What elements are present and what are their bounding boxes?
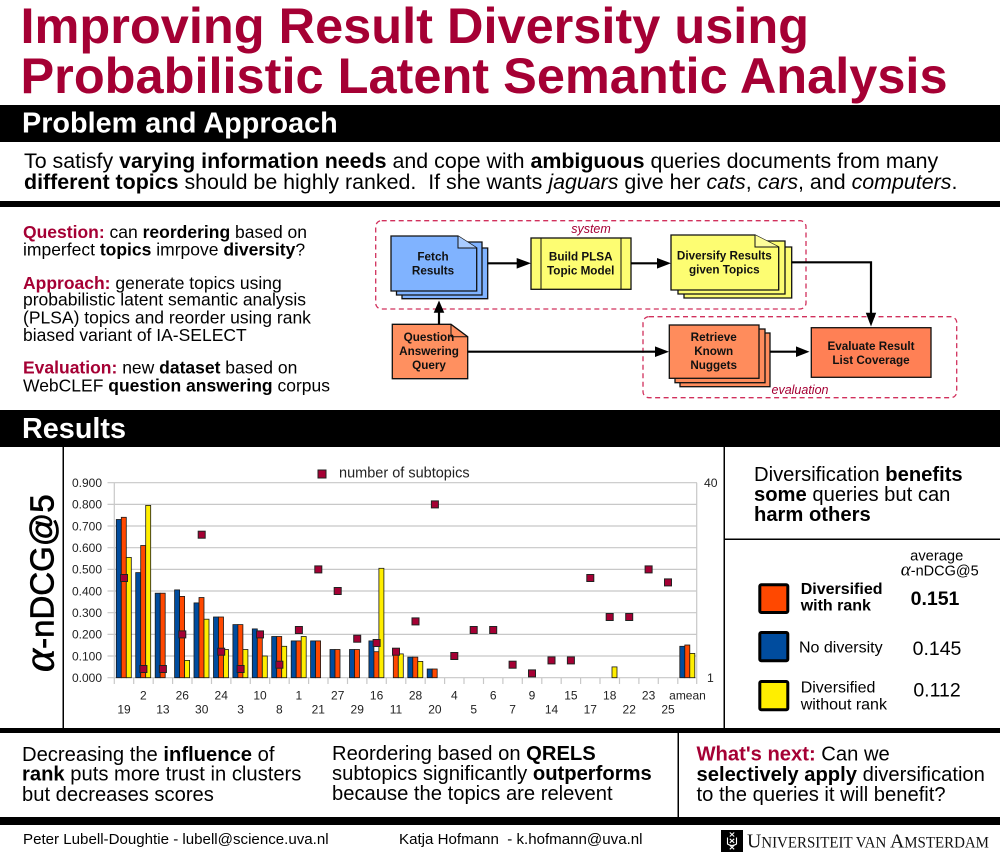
box: fetch results: Fetch	[417, 251, 449, 264]
x axis labels: 1	[296, 688, 303, 702]
y axis labels: 1	[707, 671, 714, 685]
text block: question	[23, 222, 307, 260]
text block: qrels	[332, 743, 652, 805]
x axis labels: 17	[584, 702, 597, 716]
logo: university of amsterdam: UNIVERSITEIT VAN AMSTERDAM	[747, 830, 989, 852]
panel: evaluation boundary	[643, 317, 957, 398]
arrow: retrieve to evaluate	[770, 346, 810, 357]
heading: problem and approach: Problem and Approach	[22, 108, 338, 140]
text block: evaluation: Evaluation: new dataset based on	[23, 358, 297, 378]
text block: influence of rank	[22, 744, 301, 806]
x axis labels: 27	[331, 688, 345, 702]
box: diversify results	[671, 235, 792, 298]
heading: problem and approach	[0, 105, 1000, 142]
x axis labels: 29	[351, 702, 364, 716]
legend item: diversified without rank: Diversified	[801, 680, 875, 697]
box: question answering query	[392, 324, 468, 379]
x axis labels: 20	[428, 702, 442, 716]
box: evaluate result list coverage	[811, 328, 931, 377]
box: build plsa topic model: Build PLSA	[549, 251, 613, 264]
panel: question approach evaluation	[23, 222, 330, 396]
box: fetch results	[391, 236, 488, 299]
text block: approach: Approach: generate topics using	[23, 273, 282, 293]
footer: authors: Katja Hofmann - k.hofmann@uva.nl	[399, 831, 643, 848]
text block: what's next: to the queries it will benefit?	[696, 784, 946, 806]
box: question answering query: Question	[404, 331, 454, 344]
x axis labels: 4	[451, 688, 458, 702]
text block: question: imperfect topics imrpove diversity?	[23, 240, 305, 260]
arrow: query to retrieve	[468, 346, 669, 357]
box: retrieve known nuggets: Retrieve	[691, 331, 737, 344]
x axis labels: 26	[176, 688, 189, 702]
x axis labels: 2	[140, 688, 147, 702]
x axis labels: 22	[623, 702, 636, 716]
title	[20, 0, 948, 104]
x axis labels: amean	[669, 688, 706, 702]
text block: influence of rank: Decreasing the influence of	[22, 744, 275, 766]
box: question answering query: Answering	[399, 345, 459, 358]
text block: approach	[23, 273, 311, 345]
text block: qrels: Reordering based on QRELS	[332, 743, 596, 765]
y axis labels: 0.900	[72, 476, 102, 490]
number of subtopics markers	[120, 501, 672, 677]
text block: evaluation: WebCLEF question answering corpus	[23, 376, 330, 396]
box: fetch results: Results	[412, 265, 455, 278]
x axis labels: 19	[117, 702, 131, 716]
legend item: diversified without rank: 0.112	[913, 680, 961, 702]
box: retrieve known nuggets: Nuggets	[690, 359, 738, 372]
box: build plsa topic model: Topic Model	[547, 265, 614, 278]
y axis labels: 0.500	[72, 563, 102, 577]
x axis labels: 3	[237, 702, 244, 716]
flow diagram	[376, 221, 957, 398]
y axis labels	[72, 476, 718, 685]
text block: influence of rank: but decreases scores	[22, 784, 214, 806]
legend item: no diversity: 0.145	[913, 638, 962, 660]
box: evaluate result list coverage: List Coverage	[832, 354, 910, 367]
panel: system boundary: system	[571, 222, 611, 236]
legend header: average	[910, 549, 963, 565]
text block: qrels: subtopics significantly outperforms	[332, 763, 652, 785]
bars	[116, 505, 695, 678]
legend item: diversified with rank	[760, 581, 960, 615]
box: retrieve known nuggets	[669, 325, 770, 387]
y axis labels: 0.300	[72, 606, 102, 620]
x axis labels: 16	[370, 688, 384, 702]
x axis labels: 25	[661, 702, 675, 716]
x axis labels: 13	[156, 702, 170, 716]
legend item: diversified with rank: Diversified	[801, 581, 883, 598]
box: diversify results: given Topics	[689, 263, 760, 276]
legend item: no diversity	[760, 632, 962, 661]
y axis labels: 0.600	[72, 541, 102, 555]
heading: results: Results	[22, 413, 126, 445]
panel: system boundary	[376, 221, 806, 309]
y axis labels: 0.000	[72, 671, 102, 685]
text block: approach: probabilistic latent semantic analysis	[23, 290, 306, 310]
arrow: build to diversify	[631, 258, 671, 269]
footer: authors: Peter Lubell-Doughtie - lubell@science.uva.nl	[23, 831, 329, 848]
text block: what's next: What's next: Can we	[696, 744, 890, 766]
box: retrieve known nuggets: Known	[694, 345, 733, 358]
x axis labels: 24	[215, 688, 228, 702]
x axis labels: 9	[529, 688, 536, 702]
text block: problem statement: different topics should be highly ranked. If she wants jaguars give her cats, cars, and computers.	[24, 170, 957, 194]
x axis labels: 14	[545, 702, 558, 716]
legend header	[901, 549, 979, 581]
text block: problem statement: To satisfy varying information needs and cope with ambiguous queries documents from many	[24, 149, 938, 173]
legend item: diversified without rank: without rank	[800, 696, 888, 713]
box: evaluate result list coverage: Evaluate Result	[827, 340, 915, 353]
text block: problem statement	[24, 149, 957, 194]
text block: qrels: because the topics are relevent	[332, 783, 613, 805]
legend item: diversified with rank: with rank	[800, 598, 871, 615]
legend item: diversified with rank: 0.151	[911, 588, 960, 610]
axis title: alpha-nDCG@5: α-nDCG@5	[14, 494, 64, 672]
legend header: α-nDCG@5	[901, 560, 979, 581]
box: build plsa topic model	[531, 238, 631, 289]
x axis labels: 6	[490, 688, 497, 702]
y axis labels: 0.100	[72, 649, 102, 663]
text block: influence of rank: rank puts more trust in clusters	[22, 764, 301, 786]
y axis labels: 0.400	[72, 584, 102, 598]
y axis labels: 0.200	[72, 628, 102, 642]
text block: diversification benefits: some queries but can	[754, 484, 950, 506]
box: question answering query: Query	[412, 359, 446, 372]
text block: what's next: selectively apply diversification	[696, 764, 985, 786]
text block: approach: (PLSA) topics and reorder using rank	[23, 307, 311, 327]
arrow: fetch to build	[488, 258, 531, 269]
x axis labels: 10	[253, 688, 267, 702]
title: Probabilistic Latent Semantic Analysis	[20, 47, 948, 104]
x axis labels: 5	[470, 702, 477, 716]
x axis labels: 21	[312, 702, 325, 716]
arrow: query to fetch	[434, 300, 444, 324]
bar chart: alpha-nDCG@5 per query	[72, 466, 718, 716]
x axis labels: 28	[409, 688, 422, 702]
heading: results	[0, 410, 1000, 447]
text block: diversification benefits: Diversification benefits	[754, 464, 963, 486]
x axis labels: 23	[642, 688, 656, 702]
footer: authors	[23, 831, 643, 848]
x axis labels: 18	[603, 688, 617, 702]
legend item: diversified without rank	[760, 680, 961, 713]
text block: evaluation	[23, 358, 330, 396]
legend item: no diversity: No diversity	[799, 640, 883, 657]
text block: question: Question: can reordering based on	[23, 222, 307, 242]
text block: diversification benefits	[754, 464, 963, 526]
y axis labels: 0.800	[72, 498, 102, 512]
legend: average scores	[760, 549, 979, 713]
chart legend: number of subtopics	[339, 466, 470, 482]
y axis labels: 0.700	[72, 519, 102, 533]
box: diversify results: Diversify Results	[677, 249, 772, 262]
x axis labels: 8	[276, 702, 283, 716]
x axis labels	[117, 688, 706, 716]
text block: diversification benefits: harm others	[754, 504, 871, 526]
icon: uva crest	[721, 830, 743, 852]
arrow: diversify to evaluate	[792, 262, 876, 326]
x axis labels: 15	[564, 688, 578, 702]
x axis labels: 7	[509, 702, 516, 716]
x axis labels: 11	[390, 702, 403, 716]
text block: approach: biased variant of IA-SELECT	[23, 325, 247, 345]
y axis labels: 40	[704, 476, 718, 490]
panel: evaluation boundary: evaluation	[772, 383, 829, 397]
text block: what's next	[696, 744, 985, 806]
x axis labels: 30	[195, 702, 209, 716]
